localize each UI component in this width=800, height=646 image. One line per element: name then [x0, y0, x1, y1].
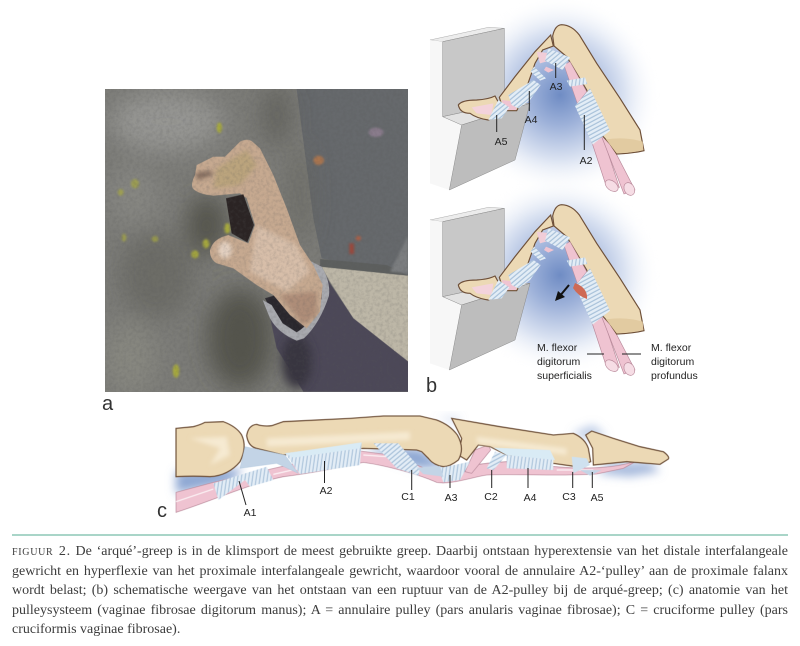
- pulley labels panel c: A4: [524, 492, 537, 504]
- bone highlights: [190, 432, 567, 465]
- C2 pulley: [487, 452, 507, 470]
- cuff opening: [265, 282, 324, 333]
- label M. flexor digitorum profundus: [622, 342, 698, 382]
- caption: cruciformis vaginae fibrosae).: [12, 622, 180, 637]
- rupture of A2 pulley: [573, 283, 587, 299]
- gap between thumb and fingers: [226, 194, 254, 242]
- pulley labels panel c: A2: [320, 485, 333, 497]
- label b: b: [426, 375, 437, 397]
- A2 pulley: [285, 443, 362, 474]
- tendons: [176, 451, 637, 512]
- A1 pulley: [213, 467, 273, 500]
- blue glow: [176, 417, 660, 493]
- pulley labels upper diagram: A4: [525, 114, 538, 126]
- arrow: force direction: [555, 285, 569, 301]
- pulley labels panel c: A5: [591, 492, 604, 504]
- label M. flexor digitorum profundus: M. flexor: [651, 342, 692, 354]
- panel b: lower diagram: [430, 175, 660, 377]
- caption: [12, 544, 788, 637]
- A5 pulley: [580, 470, 602, 476]
- A4 pulley: [507, 455, 553, 470]
- label a: a: [102, 393, 114, 415]
- panel b: upper diagram: [430, 0, 660, 197]
- label M. flexor digitorum superficialis: [537, 342, 604, 382]
- rock texture: [105, 89, 408, 392]
- pulley labels panel c: C2: [484, 491, 498, 503]
- C3 pulley: [572, 457, 590, 473]
- sleeve cuff: [263, 260, 329, 341]
- caption: figuur 2. De ‘arqué’-greep is in de klimsport de meest gebruikte greep. Daarbij ontstaan hyperextensie van het distale interfalangeale: [12, 544, 788, 559]
- label M. flexor digitorum superficialis: digitorum: [537, 356, 580, 368]
- label M. flexor digitorum superficialis: superficialis: [537, 370, 592, 382]
- caption: gewricht en hyperflexie van het proximale interfalangeale gewricht, waardoor vooral de annulaire A2-‘pulley’ aan de proximale falanx: [12, 564, 788, 579]
- caption: wordt belast; (b) schematische weergave van het ontstaan van een ruptuur van de A2-pulley bij de arqué-greep; (c) anatomie van het: [12, 583, 788, 598]
- A3 pulley: [438, 462, 470, 482]
- hand shading: [197, 150, 317, 325]
- hand: [192, 140, 323, 328]
- pulley labels panel c: C3: [562, 491, 576, 503]
- leader lines panel c: [239, 461, 592, 505]
- leader lines upper diagram: [497, 63, 584, 150]
- pulley labels upper diagram: A5: [495, 136, 508, 148]
- jacket sleeve: [267, 265, 408, 392]
- pulley labels panel c: C1: [401, 491, 415, 503]
- label c: c: [157, 500, 167, 522]
- pulley labels upper diagram: A2: [580, 155, 593, 167]
- panel a: photo of climbing hand: [103, 85, 408, 395]
- caption rule: [12, 534, 788, 536]
- climbing holds: [313, 128, 408, 273]
- C1 pulley: [373, 443, 420, 476]
- rock shading: [103, 85, 310, 395]
- bones: [176, 422, 244, 477]
- label M. flexor digitorum profundus: profundus: [651, 370, 698, 382]
- pulley labels panel c: [244, 485, 604, 519]
- caption: pulleysysteem (vaginae fibrosae digitorum manus); A = annulaire pulley (pars anularis vaginae fibrosae); C = cruciforme pulley (pars: [12, 603, 788, 618]
- pulley labels upper diagram: A3: [550, 81, 563, 93]
- panel c: extended finger anatomy: [176, 416, 669, 512]
- ligament fan: [240, 447, 298, 473]
- gravel: [322, 267, 408, 362]
- lichen spots: [118, 122, 230, 378]
- pulley labels upper diagram: [495, 81, 593, 167]
- pulley labels panel c: A1: [244, 507, 257, 519]
- label M. flexor digitorum profundus: digitorum: [651, 356, 694, 368]
- pulley labels panel c: A3: [445, 492, 458, 504]
- label M. flexor digitorum superficialis: M. flexor: [537, 342, 578, 354]
- photo background wall: [297, 89, 408, 275]
